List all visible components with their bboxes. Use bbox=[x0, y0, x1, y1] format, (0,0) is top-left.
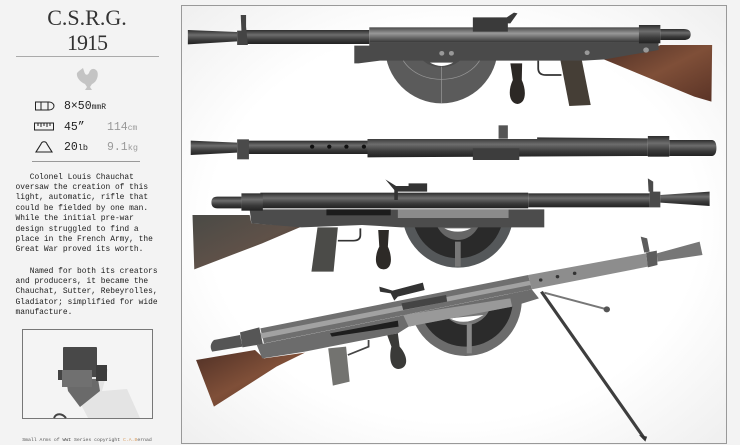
jacket bbox=[367, 137, 648, 157]
title: C.S.R.G. bbox=[47, 5, 127, 30]
rear cap bbox=[660, 29, 691, 40]
stock bbox=[196, 350, 305, 407]
weight metric: 9.1kg bbox=[107, 141, 138, 154]
barrel bbox=[528, 193, 650, 207]
receiver bbox=[354, 43, 659, 63]
rear band bbox=[241, 193, 263, 211]
bolt opening bbox=[326, 209, 391, 215]
rear sight bbox=[473, 13, 517, 32]
muzzle bbox=[188, 30, 237, 44]
rear band bbox=[639, 25, 660, 43]
stock bbox=[601, 45, 712, 102]
jacket bbox=[260, 275, 532, 343]
muzzle bbox=[191, 141, 237, 155]
magazine housing bbox=[560, 60, 591, 106]
drum magazine bbox=[404, 227, 512, 268]
pistol grip bbox=[510, 63, 525, 104]
lower block bbox=[473, 148, 519, 160]
pistol grip bbox=[387, 333, 406, 369]
barrel jacket bbox=[369, 27, 641, 43]
calibre: 8×50mmR bbox=[64, 100, 106, 113]
muzzle bbox=[660, 192, 710, 206]
rear end bbox=[669, 140, 716, 156]
rear sight bbox=[385, 179, 427, 200]
stock bbox=[192, 215, 301, 269]
icon: weight bbox=[35, 141, 53, 152]
jacket bbox=[260, 193, 528, 208]
rear cap bbox=[211, 197, 241, 208]
text block: history: Colonel Louis Chauchat oversaw the creation of this light, automatic, rifle that could be fielded by one man. While the initial pre-war design struggled to find a place in the French Army, the Great War proved its worth. bbox=[16, 172, 153, 254]
title divider bbox=[16, 56, 159, 57]
rear band bbox=[240, 327, 263, 347]
receiver rivets bbox=[439, 47, 649, 56]
length: 45” bbox=[64, 121, 85, 134]
rear sight bbox=[379, 283, 425, 301]
title: 1915 bbox=[67, 30, 107, 55]
title bbox=[47, 5, 127, 55]
sight post bbox=[499, 125, 508, 139]
trigger guard bbox=[338, 228, 360, 241]
pistol grip bbox=[376, 230, 391, 269]
specs divider bbox=[32, 161, 140, 162]
receiver bbox=[257, 289, 539, 358]
text block: names: Named for both its creators and producers, it became the Chauchat, Sutter, Rebeyrolles, Gladiator; simplified for wide manufacture. bbox=[16, 266, 158, 317]
drum magazine bbox=[386, 60, 496, 104]
bipod bbox=[541, 292, 647, 442]
trigger guard bbox=[348, 340, 369, 355]
rifle: top view bbox=[191, 125, 716, 160]
bolt opening bbox=[330, 321, 399, 337]
front sight bbox=[237, 15, 248, 45]
barrel bbox=[246, 30, 369, 44]
receiver slot bbox=[401, 295, 447, 310]
length metric: 114cm bbox=[107, 121, 137, 134]
barrel holes bbox=[539, 272, 576, 282]
rear band bbox=[648, 136, 669, 157]
icon: rooster bbox=[76, 68, 98, 90]
magazine housing bbox=[311, 227, 338, 272]
front band and sight bbox=[641, 237, 657, 267]
trigger guard bbox=[538, 61, 561, 75]
footer credit: Small Arms of WWI Series copyright C.A.Bernad bbox=[22, 438, 152, 443]
rear cap bbox=[211, 335, 242, 352]
receiver bbox=[250, 209, 544, 227]
rifle: left profile bbox=[188, 12, 712, 106]
receiver plate bbox=[403, 298, 512, 327]
front band bbox=[648, 178, 660, 207]
inset: detail of sight bbox=[22, 329, 153, 419]
rifle: right profile bbox=[192, 178, 710, 272]
receiver plate bbox=[398, 209, 509, 218]
barrel holes bbox=[310, 145, 366, 149]
specifications bbox=[34, 100, 138, 154]
rifle: three-quarter view with bipod bbox=[196, 237, 702, 442]
front band bbox=[237, 139, 249, 159]
muzzle bbox=[657, 242, 702, 262]
icon: ruler bbox=[34, 122, 54, 130]
barrel bbox=[528, 253, 648, 289]
drum magazine bbox=[416, 304, 522, 356]
magazine housing bbox=[328, 347, 350, 386]
barrel bbox=[246, 141, 367, 154]
panel: rifle photographs bbox=[181, 5, 727, 444]
icon: cartridge bbox=[35, 102, 54, 110]
weight: 20lb bbox=[64, 141, 88, 154]
